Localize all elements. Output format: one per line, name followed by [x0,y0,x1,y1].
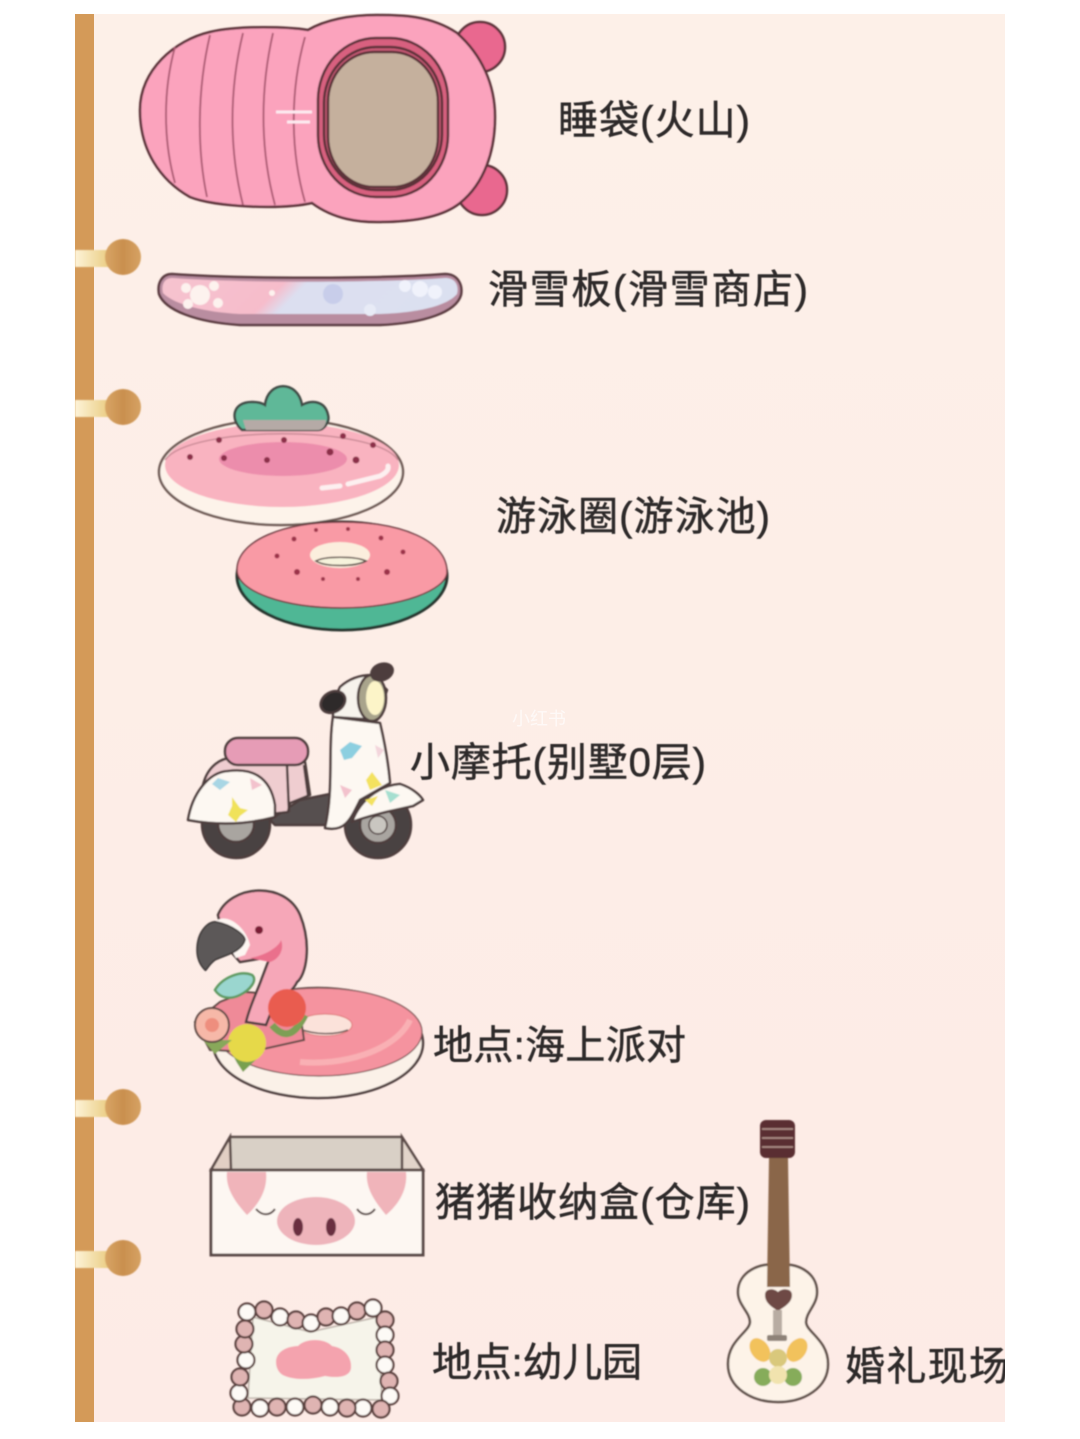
flamingo lei base [195,992,304,1052]
icon: scooter [188,661,423,858]
notebook spine [75,14,94,1422]
icon: snowboard [159,274,461,325]
label: sleeping bag: 睡袋(火山) [558,99,750,143]
label: snowboard: 滑雪板(滑雪商店) [488,268,808,312]
notebook binding rings [75,239,141,1276]
icon: ring crown leaf [235,386,328,430]
icon: pig storage box [211,1137,423,1255]
icon: guitar [728,1120,828,1402]
guitar flower decoration [745,1334,812,1386]
icon: watermelon swim rings [159,386,447,630]
label: sea party: 地点:海上派对 [433,1024,686,1068]
flamingo head and neck [218,891,307,1025]
label: pig storage box: 猪猪收纳盒(仓库) [435,1181,750,1225]
label: swim ring: 游泳圈(游泳池) [496,495,770,539]
label: wedding venue: 婚礼现场 [845,1345,1009,1389]
label: scooter: 小摩托(别墅0层) [410,741,706,785]
icon: pink sleeping bag [140,15,507,222]
icon: flamingo float [195,891,423,1098]
watermark: 小红书 [512,709,566,729]
icon: pillow with bobbles [230,1300,398,1418]
label: kindergarten: 地点:幼儿园 [432,1341,642,1385]
